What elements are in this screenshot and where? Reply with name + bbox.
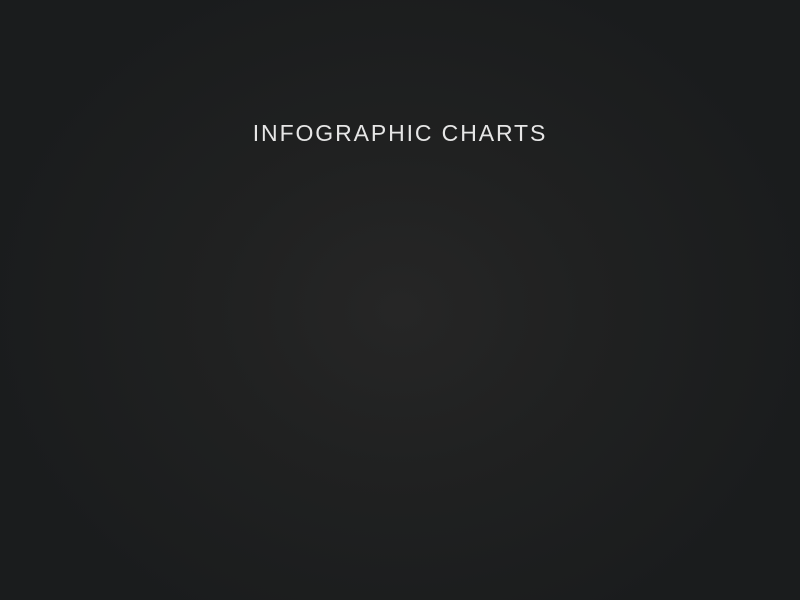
title: INFOGRAPHIC CHARTS: [253, 120, 547, 146]
